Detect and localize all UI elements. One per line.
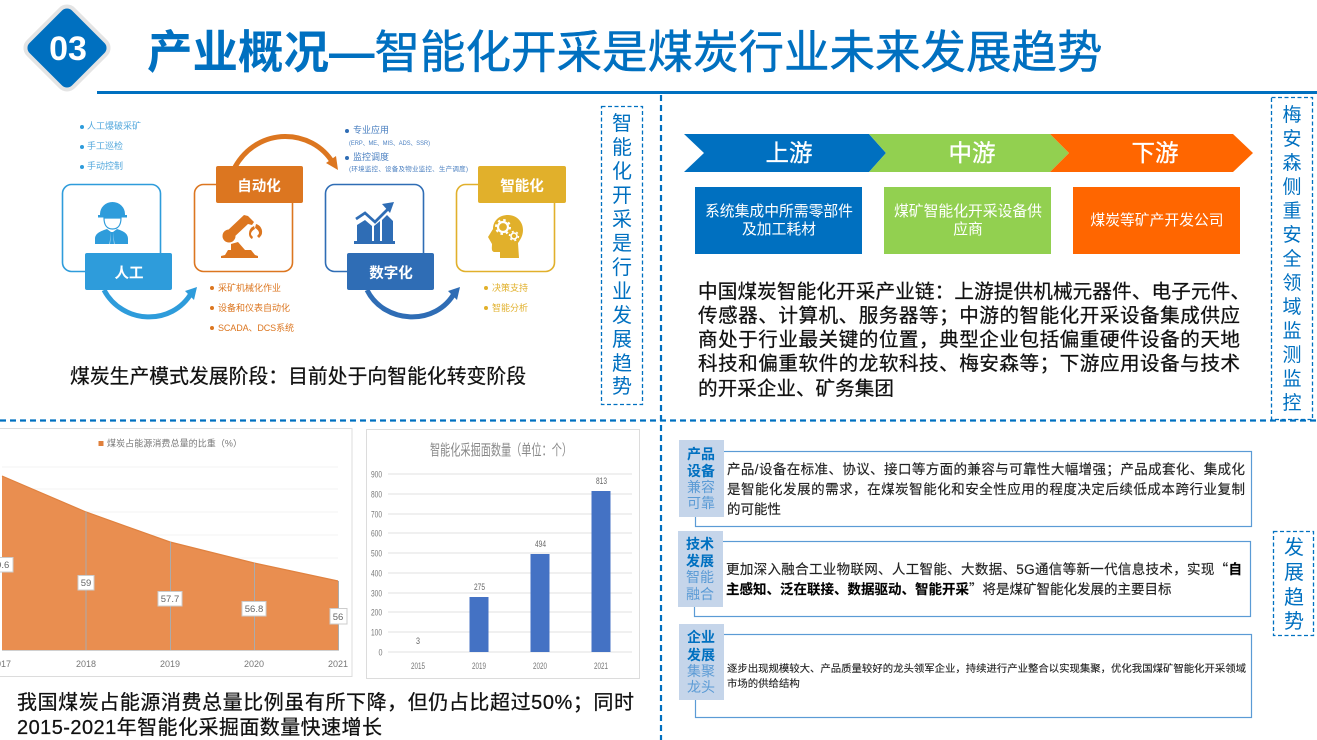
- side label: Mine Anson safety focus: 控: [1282, 392, 1302, 414]
- caption: charts: [17, 686, 634, 739]
- arrow: upstream: 上游: [766, 140, 812, 166]
- side label: Mine Anson safety focus: 域: [1282, 296, 1302, 318]
- panel: trend enterprise clustering: 集聚: [687, 663, 715, 679]
- panel: trend technology integration: 技术: [686, 536, 714, 552]
- x axis years: 2018: [76, 659, 96, 669]
- panel: trend product compatibility: 兼容: [687, 479, 715, 495]
- box: downstream: 煤炭等矿产开发公司: [1090, 211, 1224, 229]
- bars: [470, 491, 610, 652]
- bar labels: 813: [596, 476, 607, 487]
- stage: intelligent: [456, 166, 566, 313]
- text: automation bullets: [210, 282, 294, 333]
- y axis labels: 700: [371, 510, 382, 520]
- icon: section number diamond: 03: [49, 30, 87, 68]
- text: manual bullets: 手工巡检: [87, 140, 123, 151]
- text: manual bullets: [80, 120, 141, 171]
- text: intelligent bullets: 决策支持: [492, 282, 528, 293]
- side label: Mine Anson safety focus: 重: [1282, 200, 1302, 222]
- x axis years: [0, 659, 348, 669]
- chart title: 智能化采掘面数量（单位：个）: [430, 441, 572, 459]
- y axis labels: 900: [371, 470, 382, 480]
- stage: intelligent: 智能化: [500, 177, 544, 195]
- y axis labels: 400: [371, 568, 382, 580]
- text: automation bullets: 设备和仪表自动化: [218, 302, 290, 313]
- x axis years: 2020: [244, 659, 264, 669]
- bar labels: 3: [416, 636, 420, 647]
- text: compatibility: 产品/设备在标准、协议、接口等方面的兼容与可靠性大幅增强；产品成套化、集成化: [727, 458, 1245, 478]
- panel: trend product compatibility: [679, 440, 1252, 526]
- x axis years: 2019: [472, 661, 486, 672]
- data labels: 57.7: [161, 594, 179, 605]
- text: manual bullets: 人工爆破采矿: [87, 120, 141, 131]
- panel: trend technology integration: 发展: [686, 553, 714, 569]
- x axis years: 2021: [594, 661, 608, 672]
- box: upstream: 及加工耗材: [742, 221, 816, 238]
- caption: charts: 我国煤炭占能源消费总量比例虽有所下降，但仍占比超过50%；同时: [17, 686, 634, 715]
- side label: Mine Anson safety focus: 安: [1282, 128, 1302, 150]
- side label: development trend: 发: [1284, 536, 1304, 559]
- y axis labels: 500: [371, 548, 382, 560]
- y axis labels: 300: [371, 588, 382, 600]
- side label: Mine Anson safety focus: 梅: [1282, 104, 1302, 126]
- data labels: 59: [81, 578, 91, 589]
- y axis labels: 100: [371, 628, 382, 638]
- arrow: midstream: 中游: [948, 140, 996, 166]
- text: technology: 更加深入融合工业物联网、人工智能、大数据、5G通信等新一代信息技术，实现“自: [726, 558, 1242, 578]
- text: chain description: 商处于行业最关键的位置，典型企业包括偏重硬件设备的天地: [698, 323, 1240, 352]
- text: chain description: 中国煤炭智能化开采产业链：上游提供机械元器件、电子元件、: [698, 275, 1250, 304]
- panel: trend enterprise clustering: 发展: [687, 647, 715, 663]
- text: technology: 主感知、泛在联接、数据驱动、智能开采”将是煤矿智能化发展的主要目标: [726, 578, 1172, 598]
- text: compatibility: 的可能性: [727, 502, 781, 517]
- text: automation bullets: SCADA、DCS系统: [218, 322, 294, 333]
- side label: intelligent mining trend: 化: [612, 160, 632, 183]
- text: digital bullets: 监控调度: [353, 151, 389, 162]
- side label: Mine Anson safety focus: 侧: [1282, 176, 1302, 198]
- side label: intelligent mining trend: 趋: [612, 352, 632, 375]
- bar labels: [416, 476, 607, 647]
- side label: development trend: 势: [1284, 610, 1304, 633]
- text: enterprise: [727, 660, 1246, 690]
- text: chain description: 科技和偏重软件的龙软科技、梅安森等；下游应用设备与技术: [698, 347, 1240, 376]
- arrow: upstream: [684, 134, 886, 172]
- side label: Mine Anson safety focus: 监: [1282, 368, 1302, 390]
- side label: development trend: 展: [1284, 562, 1304, 584]
- arrow: manual to automation: [104, 290, 192, 317]
- text: automation bullets: 采矿机械化作业: [218, 282, 281, 293]
- side label: Mine Anson safety focus: 安: [1282, 224, 1302, 246]
- panel: trend enterprise clustering: 龙头: [687, 679, 715, 695]
- icon: head with gears: [488, 215, 523, 258]
- caption: charts: 2015-2021年智能化采掘面数量快速增长: [17, 716, 382, 739]
- box: downstream: [1073, 187, 1240, 254]
- side label: intelligent mining trend: 开: [612, 185, 632, 207]
- arrow: automation to digital: [235, 136, 333, 167]
- y axis labels: 0: [378, 648, 382, 658]
- x axis years: 2015: [411, 661, 425, 672]
- panel: coal production stages: [62, 120, 566, 389]
- stage: automation: 自动化: [237, 177, 281, 195]
- panel: trend product compatibility: 产品: [687, 446, 715, 462]
- x axis years: 2020: [533, 661, 547, 672]
- y axis labels: 800: [371, 490, 382, 500]
- text: digital bullets: (ERP、ME、MIS、ADS、SSR): [349, 140, 430, 147]
- panel: trend enterprise clustering: [679, 624, 1252, 718]
- area series: [2, 476, 338, 650]
- side label: Mine Anson safety focus: 测: [1282, 344, 1302, 366]
- stage: digital: [326, 184, 460, 317]
- panel: trend technology integration: [678, 531, 1250, 616]
- x axis years: [411, 661, 608, 672]
- text: intelligent bullets: [484, 282, 528, 313]
- box: midstream: 煤矿智能化开采设备供: [894, 202, 1042, 220]
- bar labels: 494: [535, 539, 546, 550]
- arrow: downstream: [1050, 134, 1253, 172]
- y axis labels: 600: [371, 528, 382, 540]
- side label: Mine Anson safety focus: 领: [1282, 272, 1302, 294]
- text: enterprise: 逐步出现规模较大、产品质量较好的龙头领军企业，持续进行产业整合以实现集聚，优化我国煤矿智能化开采领域: [727, 660, 1246, 675]
- side label: intelligent mining trend: 智: [612, 112, 632, 135]
- y axis labels: 200: [371, 608, 382, 618]
- side label: development trend: [1274, 532, 1314, 636]
- arrow: midstream: [869, 134, 1069, 172]
- text: manual bullets: 手动控制: [87, 160, 123, 171]
- side label: intelligent mining trend: 采: [612, 208, 632, 231]
- x axis years: 2021: [328, 659, 348, 669]
- text: digital bullets: 专业应用: [353, 124, 389, 135]
- text: compatibility: 是智能化发展的需求，在煤炭智能化和安全性应用的程度决定后续低成本跨行业复制: [727, 478, 1245, 498]
- panel: industry chain: [684, 134, 1253, 400]
- chart: coal share of energy consumption: [0, 428, 352, 676]
- text: digital bullets: [345, 124, 468, 173]
- text: technology: [726, 558, 1242, 598]
- x axis years: 2019: [160, 659, 180, 669]
- side label: intelligent mining trend: 是: [612, 233, 632, 255]
- stage: digital: 数字化: [369, 264, 413, 282]
- box: midstream: [884, 187, 1051, 254]
- side label: intelligent mining trend: [602, 106, 642, 404]
- data labels: 56: [333, 612, 343, 623]
- panel: trend technology integration: 融合: [686, 586, 714, 602]
- arrow: digital to intelligent: [367, 290, 455, 317]
- icon: robot arm: [221, 215, 262, 258]
- chart: intelligent mining face count: [366, 430, 640, 678]
- icon: section number diamond: [22, 3, 112, 93]
- icon: worker: [95, 202, 128, 244]
- caption: stages: 煤炭生产模式发展阶段：目前处于向智能化转变阶段: [70, 360, 526, 389]
- panel: trend product compatibility: 设备: [687, 463, 715, 479]
- side label: Mine Anson safety focus: 全: [1282, 248, 1302, 270]
- stage: automation: [194, 136, 338, 333]
- side label: intelligent mining trend: 行: [612, 256, 632, 279]
- title: 产业概况—智能化开采是煤炭行业未来发展趋势: [147, 27, 1103, 78]
- data labels: [0, 558, 347, 624]
- side label: intelligent mining trend: 发: [612, 304, 632, 327]
- text: intelligent bullets: 智能分析: [492, 302, 528, 313]
- side label: intelligent mining trend: 能: [612, 136, 632, 159]
- box: upstream: 系统集成中所需零部件: [705, 203, 853, 220]
- text: chain description: 的开采企业、矿务集团: [698, 378, 894, 400]
- panel: trend technology integration: 智能: [686, 569, 714, 585]
- side label: intelligent mining trend: 展: [612, 329, 632, 351]
- side label: Mine Anson safety focus: 森: [1282, 152, 1302, 174]
- box: midstream: 应商: [953, 220, 983, 238]
- panel: trend product compatibility: 可靠: [687, 495, 715, 511]
- side label: intelligent mining trend: 势: [612, 375, 632, 398]
- y axis labels: [371, 470, 382, 658]
- arrow: downstream: 下游: [1132, 140, 1178, 166]
- stage: manual: 人工: [114, 265, 144, 282]
- side label: development trend: 趋: [1284, 586, 1304, 609]
- panel: trend enterprise clustering: 企业: [687, 629, 715, 645]
- legend: 煤炭占能源消费总量的比重（%）: [107, 438, 242, 448]
- box: upstream: [695, 187, 862, 254]
- text: chain description: 传感器、计算机、服务器等；中游的智能化开采设备集成供应: [698, 299, 1240, 328]
- side label: Mine Anson safety focus: 监: [1282, 320, 1302, 342]
- side label: intelligent mining trend: 业: [612, 280, 632, 303]
- text: digital bullets: (环境监控、设备及物业监控、生产调度): [349, 164, 468, 173]
- side label: Mine Anson safety focus: [1272, 98, 1312, 420]
- text: enterprise: 市场的供给结构: [727, 677, 800, 690]
- text: compatibility: [727, 458, 1245, 517]
- text: chain description: [698, 275, 1250, 400]
- bar labels: 275: [474, 582, 485, 593]
- icon: rising chart: [354, 202, 395, 244]
- stage: manual: [62, 184, 197, 317]
- data labels: 56.8: [245, 604, 263, 615]
